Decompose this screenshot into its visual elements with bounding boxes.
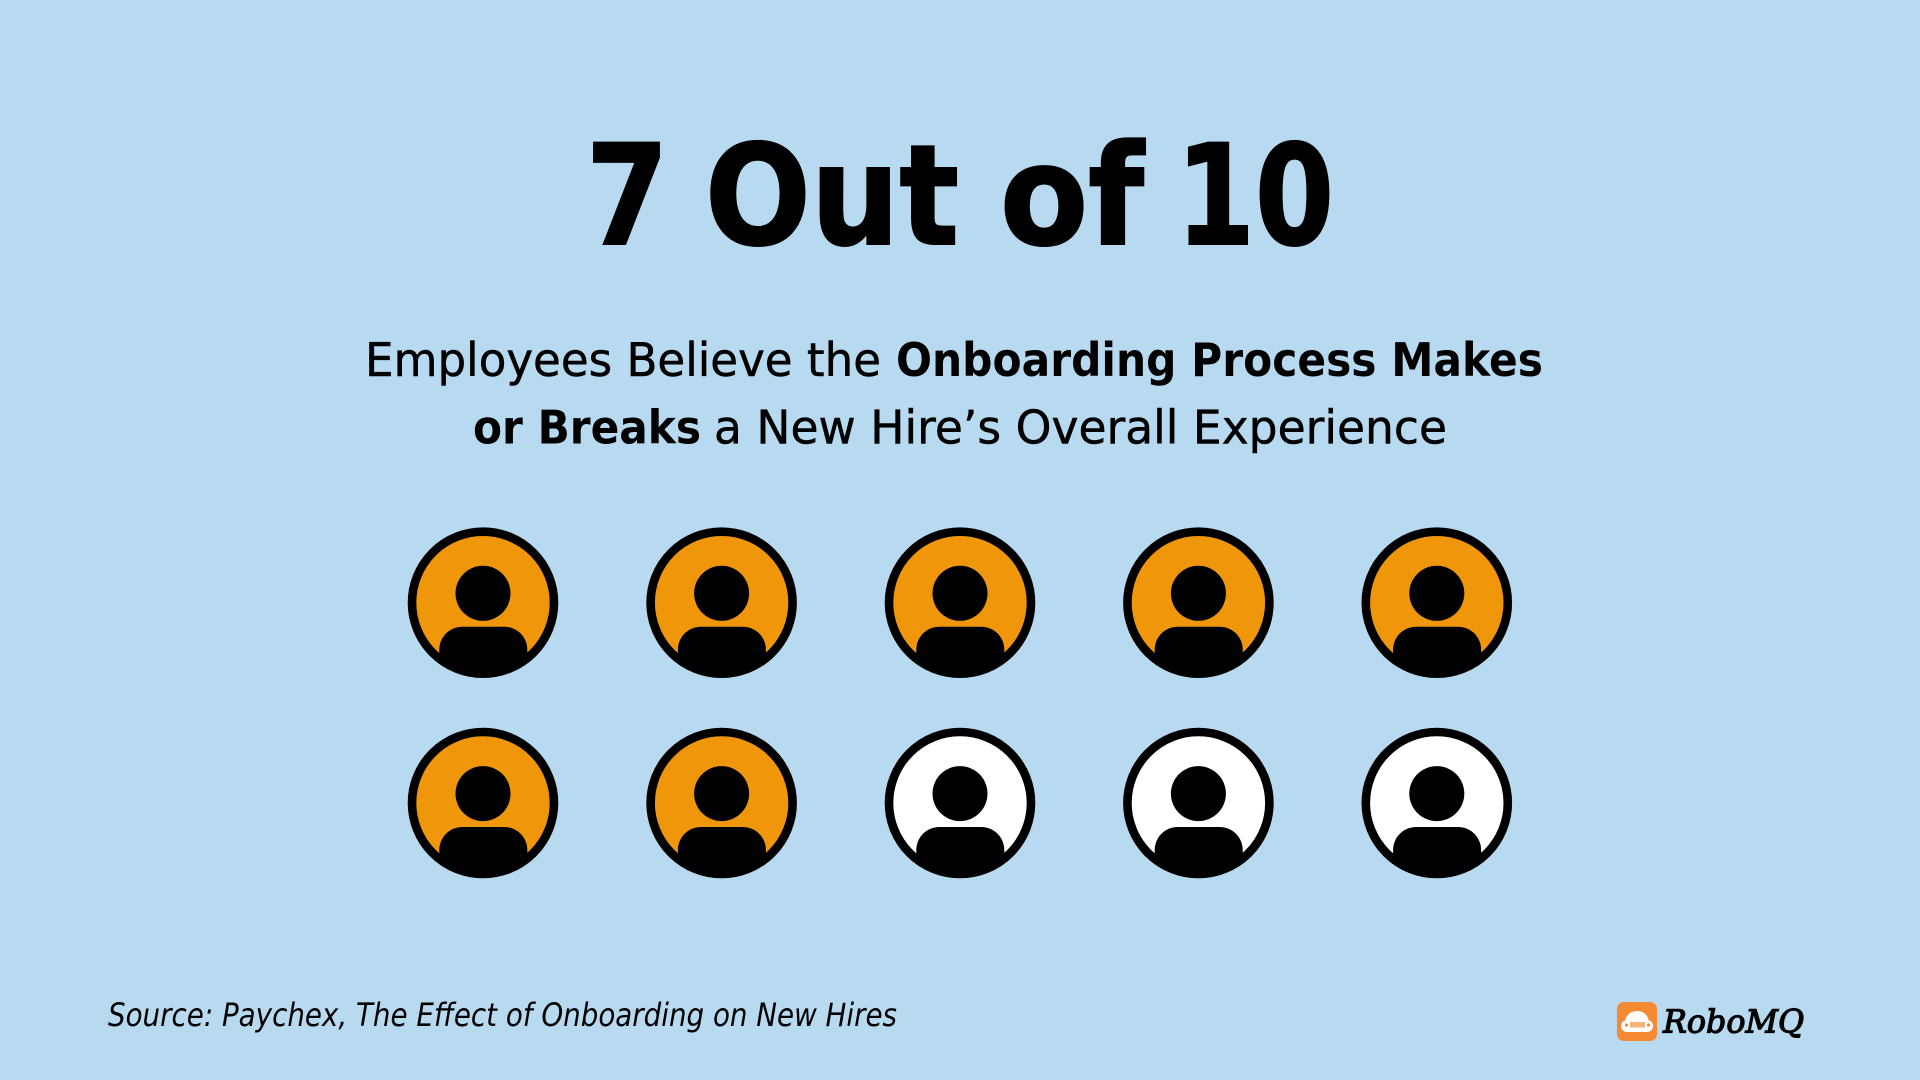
icon: person 2 highlighted (651, 532, 793, 697)
subtitle (365, 333, 1543, 454)
title: Out (705, 115, 959, 277)
icon: person 7 highlighted (651, 732, 793, 897)
subtitle: a New Hire’s Overall Experience (714, 400, 1447, 454)
title: 7 (586, 115, 668, 277)
logo wordmark: RoboMQ (1662, 1002, 1804, 1040)
subtitle: Onboarding Process Makes (896, 333, 1543, 387)
icon: person 5 highlighted (1366, 532, 1508, 697)
icon: person 4 highlighted (1127, 532, 1269, 697)
title: 10 (1176, 115, 1334, 277)
icon: person 10 plain (1366, 732, 1508, 897)
icon: person 9 plain (1127, 732, 1269, 897)
icon: person 1 highlighted (412, 532, 554, 697)
icon: person 6 highlighted (412, 732, 554, 897)
icon: logo cloud (1617, 1002, 1657, 1041)
icon: person 8 plain (889, 732, 1031, 897)
icon grid: 7 of 10 people highlighted (412, 532, 1508, 897)
subtitle: or Breaks (473, 400, 701, 454)
title: of (1000, 115, 1145, 277)
logo: RoboMQ (1617, 1002, 1804, 1041)
subtitle: Employees Believe the (365, 333, 881, 387)
source note: Source: Paychex, The Effect of Onboarding on New Hires (108, 996, 897, 1034)
icon: person 3 highlighted (889, 532, 1031, 697)
title (586, 115, 1334, 277)
